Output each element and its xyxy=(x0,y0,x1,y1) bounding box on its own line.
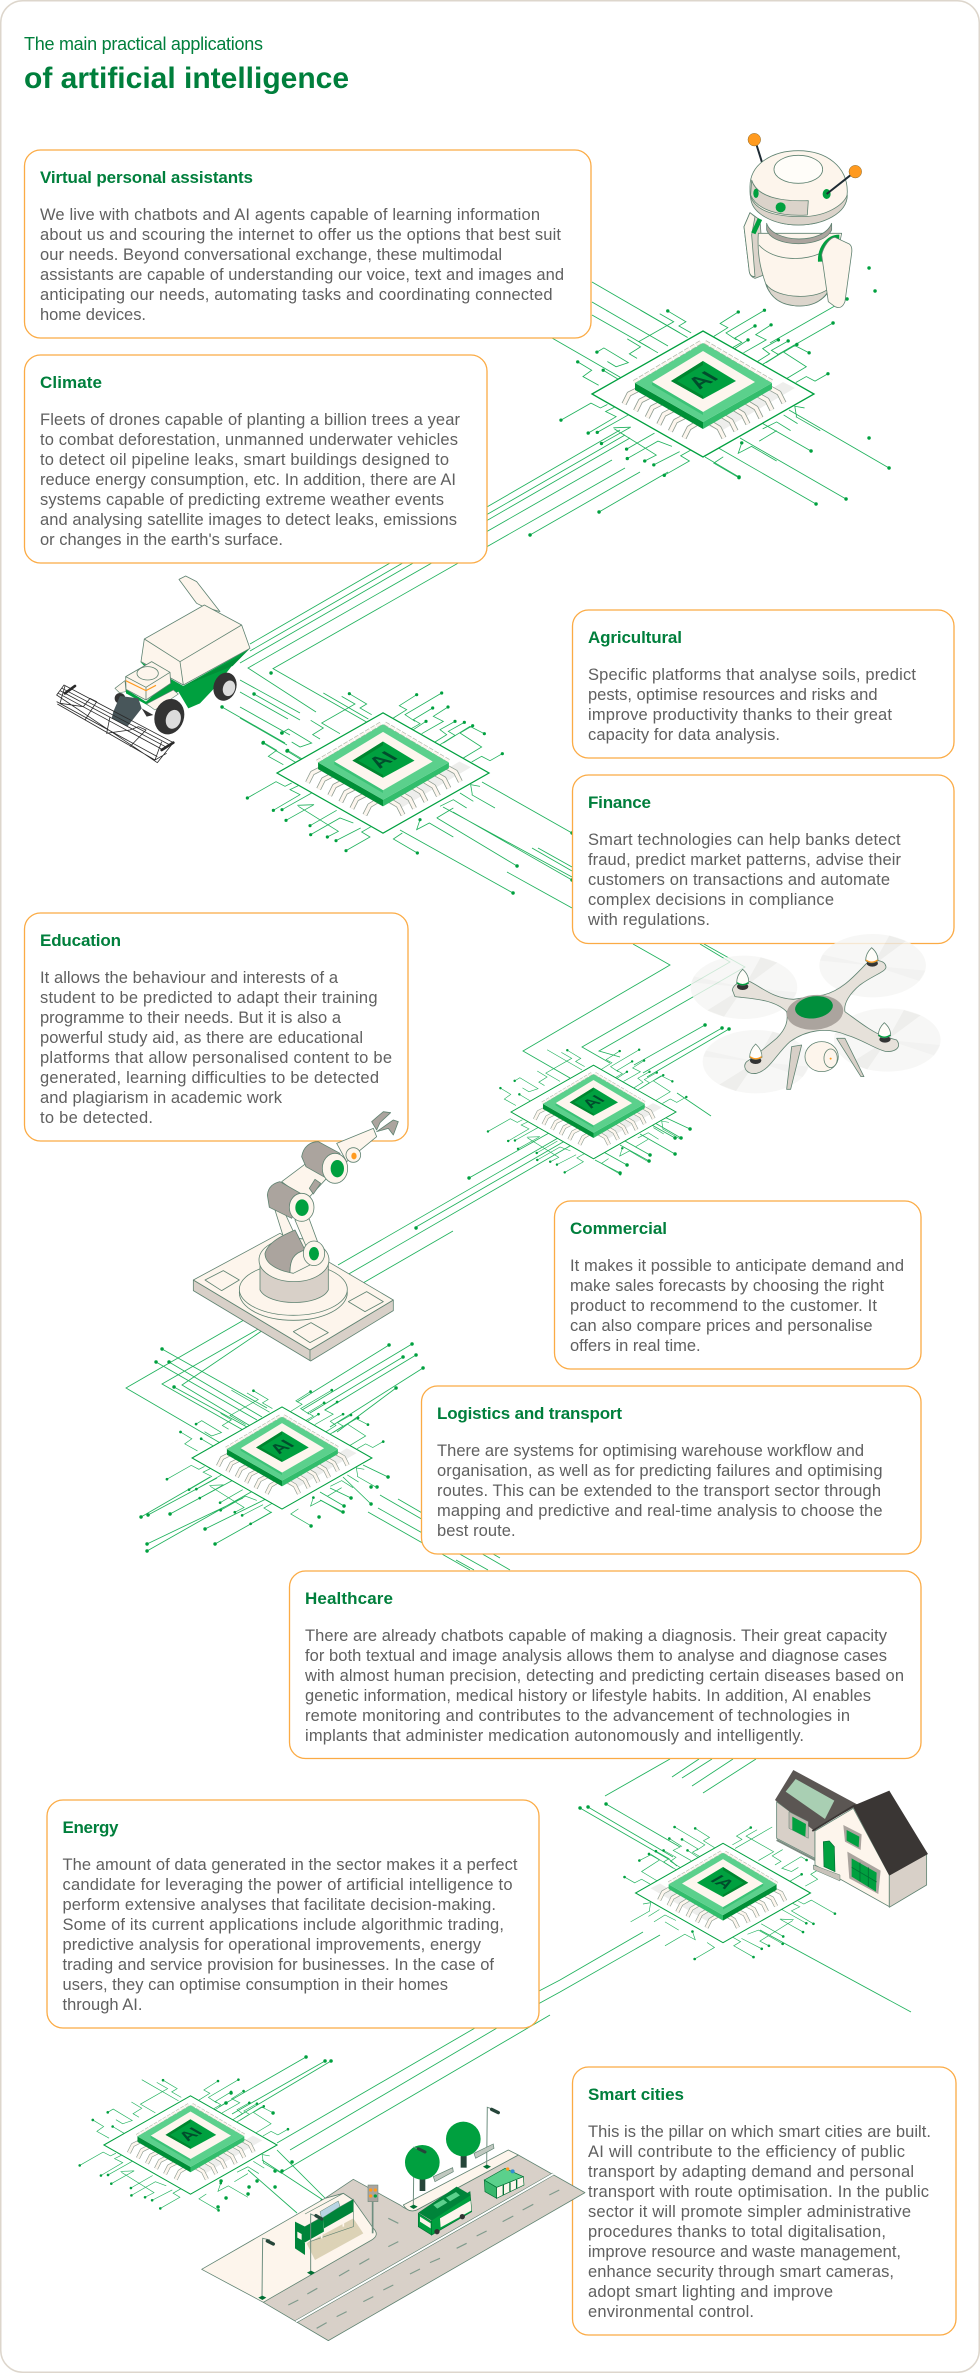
heading: Climate xyxy=(40,373,102,392)
text block: capacity for data analysis. xyxy=(588,726,780,744)
illustration: robot arm xyxy=(193,1112,398,1361)
text block: platforms that allow personalised content to be xyxy=(40,1049,392,1067)
text block: to be detected. xyxy=(40,1109,153,1127)
text block: through AI. xyxy=(62,1996,142,2014)
text block: users, they can optimise consumption in their homes xyxy=(62,1976,448,1994)
heading: Virtual personal assistants xyxy=(40,168,253,187)
panel: finance xyxy=(572,775,954,944)
text block: We live with chatbots and AI agents capable of learning information xyxy=(40,206,540,224)
chip 6 xyxy=(80,2080,288,2210)
text block: organisation, as well as for predicting failures and optimising xyxy=(437,1462,882,1480)
text block: Fleets of drones capable of planting a billion trees a year xyxy=(40,411,460,429)
text block: about us and scouring the internet to offer us the options that best suit xyxy=(40,226,561,244)
heading: Finance xyxy=(588,793,651,812)
text block: for both textual and image analysis allows them to analyse and diagnose cases xyxy=(305,1647,887,1665)
text block xyxy=(62,1856,518,2014)
text block xyxy=(588,2123,931,2321)
text block: This is the pillar on which smart cities are built. xyxy=(588,2123,931,2141)
heading: Smart cities xyxy=(588,2085,684,2104)
icon: rotor blur front left xyxy=(691,956,797,1019)
text block: mapping and predictive and real-time analysis to choose the xyxy=(437,1502,882,1520)
icon: rotor blur left xyxy=(703,1030,809,1093)
text block xyxy=(588,666,916,744)
text block: trading and service provision for businesses. In the case of xyxy=(62,1956,494,1974)
illustration: smart city street xyxy=(202,2107,585,2341)
text block: There are already chatbots capable of making a diagnosis. Their great capacity xyxy=(305,1627,888,1645)
text block: make sales forecasts by choosing the right xyxy=(570,1277,884,1295)
illustration: house xyxy=(775,1770,928,1907)
text block: predictive analysis for operational improvements, energy xyxy=(62,1936,482,1954)
text block: It allows the behaviour and interests of a xyxy=(40,969,339,987)
chip 3: AI xyxy=(577,1092,609,1111)
panel: commercial xyxy=(554,1201,921,1369)
heading: Healthcare xyxy=(305,1589,393,1608)
text block: to combat deforestation, unmanned underwater vehicles xyxy=(40,431,458,449)
text block: AI will contribute to the efficiency of public xyxy=(588,2143,905,2161)
text block xyxy=(304,1627,904,1745)
text block: The amount of data generated in the sector makes it a perfect xyxy=(62,1856,518,1874)
text block: best route. xyxy=(437,1522,516,1540)
panel: healthcare xyxy=(290,1571,921,1758)
icon: rotor blur front right xyxy=(834,1008,941,1072)
text block: powerful study aid, as there are educational xyxy=(40,1029,363,1047)
text block: or changes in the earth's surface. xyxy=(40,531,283,549)
chip 6: AI xyxy=(174,2125,207,2144)
text block: anticipating our needs, automating tasks and coordinating connected xyxy=(40,286,552,304)
chip 5 xyxy=(625,1827,835,1959)
text block: Smart technologies can help banks detect xyxy=(588,831,901,849)
panel: education xyxy=(24,913,408,1141)
text block: our needs. Beyond conversational exchange, these multimodal xyxy=(40,246,502,264)
text block: systems capable of predicting extreme weather events xyxy=(40,491,444,509)
panel: logistics and transport xyxy=(422,1386,921,1554)
text block: and plagiarism in academic work xyxy=(40,1089,283,1107)
text block: fraud, predict market patterns, advise their xyxy=(588,851,902,869)
text block: customers on transactions and automate xyxy=(588,871,890,889)
text block: Specific platforms that analyse soils, predict xyxy=(588,666,916,684)
heading: Education xyxy=(40,931,121,950)
text block: with almost human precision, detecting and predicting certain diseases based on xyxy=(304,1667,904,1685)
illustration: robot xyxy=(744,133,862,308)
text block: and analysing satellite images to detect leaks, emissions xyxy=(40,511,457,529)
panel: smart cities xyxy=(572,2067,956,2335)
heading: Commercial xyxy=(570,1219,667,1238)
text block: Some of its current applications include algorithmic trading, xyxy=(62,1916,504,1934)
text block xyxy=(40,206,564,324)
text block: home devices. xyxy=(40,306,146,324)
chip 1 xyxy=(561,310,828,478)
text block xyxy=(40,411,460,549)
text block: reduce energy consumption, etc. In addition, there are AI xyxy=(40,471,456,489)
text block: It makes it possible to anticipate demand and xyxy=(570,1257,904,1275)
text block: transport by adapting demand and personal xyxy=(588,2163,914,2181)
text block: offers in real time. xyxy=(570,1337,701,1355)
text block xyxy=(570,1257,904,1355)
chip 3 xyxy=(488,1050,686,1174)
chip 1: AI xyxy=(681,368,724,392)
text block: generated, learning difficulties to be detected xyxy=(40,1069,379,1087)
heading: Energy xyxy=(62,1818,119,1837)
title: The main practical applications xyxy=(24,34,263,54)
text block: environmental control. xyxy=(588,2303,754,2321)
panel: climate xyxy=(24,355,487,563)
illustration: drone xyxy=(691,934,941,1093)
text block: routes. This can be extended to the transport sector through xyxy=(437,1482,881,1500)
heading: Agricultural xyxy=(588,628,682,647)
text block: programme to their needs. But it is also a xyxy=(40,1009,342,1027)
text block: procedures thanks to total digitalisation, xyxy=(588,2223,886,2241)
panel: agricultural xyxy=(572,610,954,758)
illustration: harvester xyxy=(57,576,250,763)
panel: virtual personal assistants xyxy=(24,150,591,338)
text block: candidate for leveraging the power of artificial intelligence to xyxy=(62,1876,512,1894)
text block: sector it will promote simpler administrative xyxy=(588,2203,911,2221)
title xyxy=(24,34,349,95)
title: of artificial intelligence xyxy=(24,62,349,95)
heading: Logistics and transport xyxy=(437,1404,622,1423)
text block: with regulations. xyxy=(587,911,710,929)
text block xyxy=(437,1442,882,1540)
text block: student to be predicted to adapt their training xyxy=(40,989,378,1007)
text block: improve productivity thanks to their great xyxy=(588,706,892,724)
text block: improve resource and waste management, xyxy=(588,2243,901,2261)
chip 2 xyxy=(247,693,502,853)
text block: pests, optimise resources and risks and xyxy=(588,686,878,704)
chip 2: AI xyxy=(362,748,403,771)
chip 4: AI xyxy=(264,1437,299,1457)
text block: perform extensive analyses that facilitate decision-making. xyxy=(62,1896,496,1914)
text block: transport with route optimisation. In the public xyxy=(588,2183,929,2201)
circuit traces: between chips xyxy=(126,268,911,2213)
text block: implants that administer medication autonomously and intelligently. xyxy=(305,1727,804,1745)
chip 4 xyxy=(167,1390,383,1526)
text block: to detect oil pipeline leaks, smart buildings designed to xyxy=(40,451,449,469)
text block: product to recommend to the customer. It xyxy=(570,1297,877,1315)
text block: There are systems for optimising warehouse workflow and xyxy=(437,1442,864,1460)
chip 5: IA xyxy=(706,1873,739,1892)
panel: energy xyxy=(47,1800,539,2028)
text block: enhance security through smart cameras, xyxy=(588,2263,894,2281)
text block xyxy=(40,969,392,1127)
text block: can also compare prices and personalise xyxy=(570,1317,872,1335)
icon: rotor blur back right xyxy=(819,934,926,997)
text block: assistants are capable of understanding our voice, text and images and xyxy=(40,266,564,284)
text block: adopt smart lighting and improve xyxy=(588,2283,833,2301)
text block: remote monitoring and contributes to the advancement of technologies in xyxy=(305,1707,850,1725)
text block xyxy=(587,831,902,929)
text block: genetic information, medical history or lifestyle habits. In addition, AI enables xyxy=(305,1687,871,1705)
text block: complex decisions in compliance xyxy=(588,891,834,909)
